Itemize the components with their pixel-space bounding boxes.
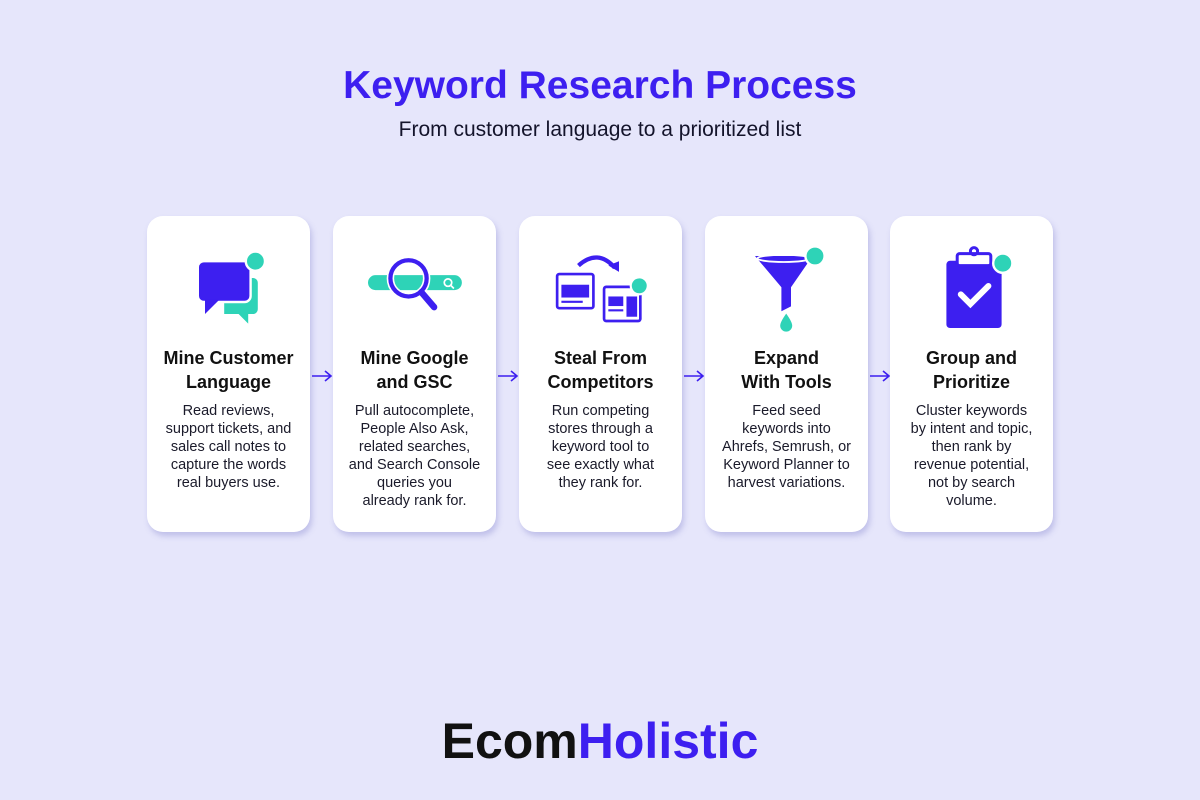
panel: group and prioritize: not by search — [928, 475, 1015, 491]
panel: mine google and gsc: People Also Ask, — [360, 421, 468, 437]
panel: mine customer language: Read reviews, — [183, 403, 274, 419]
panel: mine customer language: sales call notes to — [171, 439, 286, 455]
panel: steal from competitors — [519, 216, 682, 532]
arrow — [870, 370, 890, 382]
panel: mine google and gsc: already rank for. — [362, 493, 466, 509]
panel: group and prioritize: revenue potential, — [914, 457, 1029, 473]
panel: expand with tools: Expand — [754, 348, 819, 368]
panel: expand with tools: Feed seed — [752, 403, 821, 419]
panel: expand with tools — [705, 216, 868, 532]
panel: mine google and gsc: queries you — [377, 475, 452, 491]
panel: steal from competitors: keyword tool to — [552, 439, 649, 455]
logo: EcomHolistic — [442, 713, 758, 769]
arrow — [312, 370, 332, 382]
panel: mine google and gsc: and Search Console — [349, 457, 480, 473]
arrow — [684, 370, 704, 382]
panel: steal from competitors: they rank for. — [559, 475, 642, 491]
subtitle: From customer language to a prioritized list — [399, 118, 801, 141]
arrow — [498, 370, 518, 382]
panel: steal from competitors: Steal From — [554, 348, 647, 368]
panel: group and prioritize — [890, 216, 1053, 532]
panel: mine customer language: real buyers use. — [177, 475, 280, 491]
panel: mine google and gsc — [333, 216, 496, 532]
panel: mine customer language: Language — [186, 372, 271, 392]
icon: chat bubbles — [199, 252, 264, 324]
panel: group and prioritize: by intent and topic, — [911, 421, 1032, 437]
panel: mine customer language: support tickets, and — [166, 421, 291, 437]
panel: group and prioritize: volume. — [946, 493, 997, 509]
panel: mine customer language: capture the words — [171, 457, 286, 473]
icon: browser windows — [556, 255, 647, 322]
panel: steal from competitors: stores through a — [548, 421, 653, 437]
panel: group and prioritize: then rank by — [932, 439, 1011, 455]
panel: mine customer language — [147, 216, 310, 532]
panel: mine customer language: Mine Customer — [163, 348, 294, 368]
panel: expand with tools: Ahrefs, Semrush, or — [722, 439, 851, 455]
panel: mine google and gsc: Pull autocomplete, — [355, 403, 474, 419]
icon: funnel — [755, 248, 824, 332]
icon: clipboard check — [946, 246, 1012, 328]
icon: magnifier search bar — [368, 258, 462, 310]
panel: expand with tools: With Tools — [741, 372, 832, 392]
panel: group and prioritize: Prioritize — [933, 372, 1010, 392]
panel: expand with tools: Keyword Planner to — [723, 457, 850, 473]
panel: mine google and gsc: related searches, — [359, 439, 470, 455]
panel: expand with tools: harvest variations. — [728, 475, 845, 491]
panel: group and prioritize: Group and — [926, 348, 1017, 368]
panel: group and prioritize: Cluster keywords — [916, 403, 1027, 419]
panel: expand with tools: keywords into — [742, 421, 831, 437]
panel: steal from competitors: Competitors — [547, 372, 654, 392]
title: Keyword Research Process — [343, 64, 857, 107]
panel: mine google and gsc: Mine Google — [360, 348, 468, 368]
panel: steal from competitors: see exactly what — [547, 457, 654, 473]
panel: mine google and gsc: and GSC — [376, 372, 452, 392]
panel: steal from competitors: Run competing — [552, 403, 649, 419]
